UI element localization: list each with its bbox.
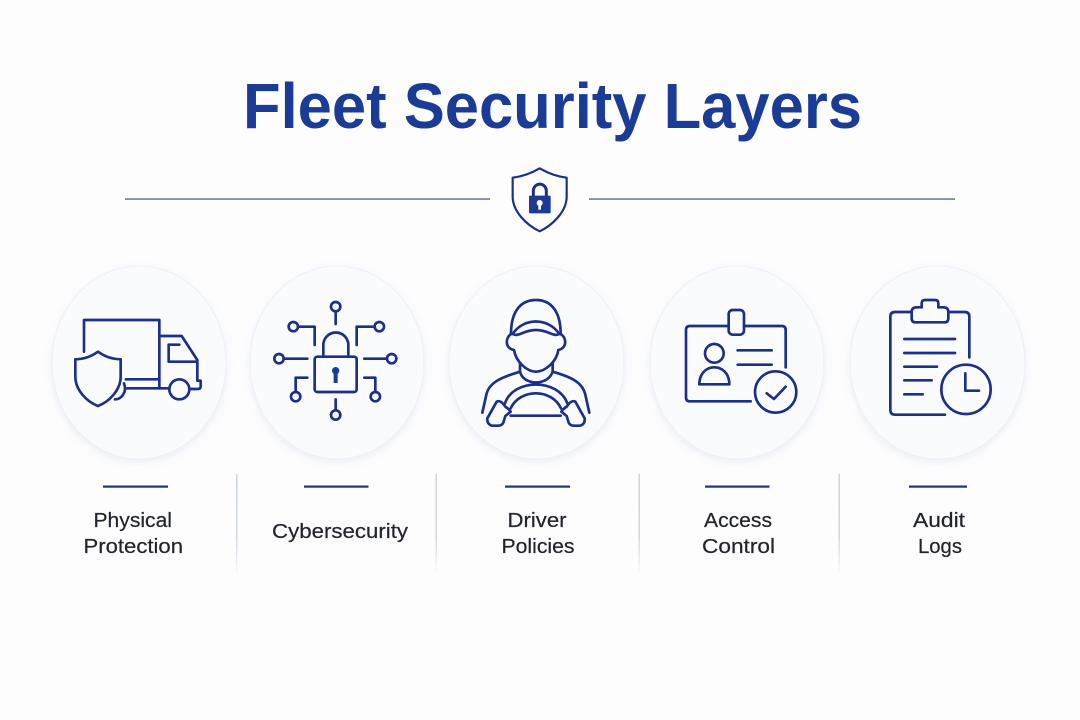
- icon: clipboard with clock: [890, 300, 991, 415]
- accent bar: [304, 486, 368, 488]
- panel: audit logs: [850, 266, 1025, 558]
- panel: cybersecurity: [250, 266, 424, 543]
- accent bar: [505, 486, 570, 488]
- icon: ID badge with check: [686, 310, 796, 413]
- label: Control: [702, 535, 775, 558]
- circle badge: [650, 266, 824, 459]
- title: Fleet Security Layers: [243, 70, 862, 142]
- label: Driver: [508, 509, 567, 532]
- accent bar: [103, 486, 168, 488]
- header divider with shield: [125, 168, 955, 231]
- icon: truck with shield: [75, 320, 201, 406]
- icon: driver at steering wheel: [482, 300, 589, 426]
- label: Policies: [502, 535, 574, 558]
- panel: access control: [650, 266, 824, 558]
- label: Physical: [94, 509, 172, 532]
- accent bar: [909, 486, 967, 488]
- panel: physical protection: [52, 266, 226, 558]
- accent bar: [705, 486, 770, 488]
- label: Access: [704, 509, 772, 532]
- circle badge: [250, 266, 424, 459]
- circle badge: [850, 266, 1025, 459]
- icon: shield with padlock: [513, 168, 567, 231]
- label: Logs: [918, 535, 962, 558]
- label: Cybersecurity: [272, 520, 409, 543]
- label: Audit: [913, 509, 965, 532]
- icon: padlock with circuit nodes: [274, 302, 396, 420]
- circle badge: [52, 266, 226, 459]
- circle badge: [449, 266, 624, 459]
- label: Protection: [84, 535, 183, 558]
- panel: driver policies: [449, 266, 624, 558]
